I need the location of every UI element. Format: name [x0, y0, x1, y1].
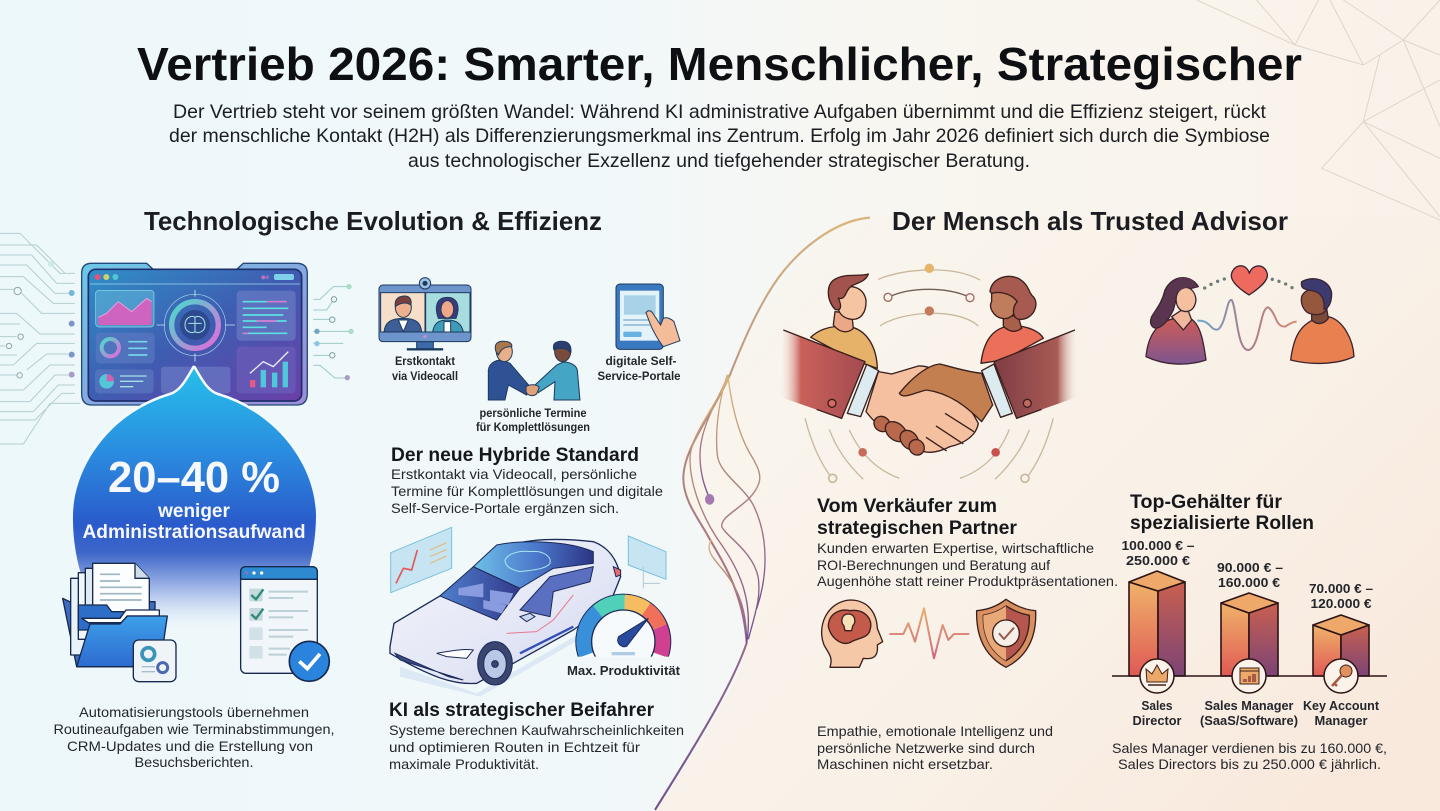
big number: 20–40 %	[108, 453, 280, 502]
divider curve	[655, 218, 870, 810]
text: customer expectations	[817, 540, 1118, 589]
intro text: aus technologischer Exzellenz und tiefgehender strategischer Beratung.	[408, 150, 1030, 172]
values: 250.000 €	[1126, 554, 1190, 568]
role labels	[1132, 699, 1380, 728]
floating chart panels	[391, 527, 666, 593]
label: max productivity: Max. Produktivität	[567, 664, 681, 678]
icon: checklist window	[241, 567, 329, 681]
values	[1122, 539, 1373, 611]
gauge	[575, 594, 672, 657]
bar: Sales Director	[1129, 571, 1185, 676]
label: self-service: Service-Portale	[598, 371, 680, 383]
icon: folder with documents and gears	[63, 563, 176, 682]
text: empathy: persönliche Netzwerke sind durch	[817, 740, 1035, 756]
heading: from seller to partner: strategischen Partner	[817, 518, 1018, 539]
text: hybrid standard: Erstkontakt via Videocall, persönliche	[391, 466, 637, 482]
role labels: (SaaS/Software)	[1200, 714, 1298, 728]
label: self-service	[598, 356, 680, 383]
text: automation: CRM-Updates und die Erstellung von	[67, 738, 313, 754]
heading: from seller to partner	[817, 496, 1018, 539]
role labels: Sales Manager	[1204, 699, 1294, 713]
heading: from seller to partner: Vom Verkäufer zum	[817, 496, 997, 517]
callout caption: Administrationsaufwand	[82, 522, 306, 543]
text: automation: Besuchsberichten.	[134, 754, 254, 770]
title: Vertrieb 2026: Smarter, Menschlicher, Strategischer	[137, 38, 1302, 90]
values: 90.000 € –	[1217, 561, 1283, 575]
icon: two people shaking hands	[488, 341, 580, 400]
role labels: Key Account	[1303, 699, 1380, 713]
text: empathy	[817, 723, 1053, 772]
label: personal meetings: persönliche Termine	[480, 408, 586, 420]
heading: top salaries: Top-Gehälter für	[1130, 492, 1283, 513]
values: 100.000 € –	[1122, 539, 1195, 553]
illustration: handshake with two people	[779, 264, 1078, 482]
callout: 20-40 percent drop	[73, 366, 316, 640]
person left	[811, 274, 877, 368]
text: hybrid standard: Termine für Komplettlösungen und digitale	[391, 483, 663, 499]
label: video call: via Videocall	[392, 371, 458, 383]
circuit lines right of dashboard	[313, 284, 354, 380]
bar: Sales Manager	[1221, 593, 1278, 676]
intro text	[169, 101, 1270, 172]
values: 160.000 €	[1218, 576, 1280, 590]
role labels: Director	[1132, 714, 1182, 728]
text: salaries: Sales Directors bis zu 250.000 € jährlich.	[1118, 756, 1381, 772]
text: empathy: Empathie, emotionale Intelligenz und	[817, 723, 1053, 739]
role labels: Manager	[1314, 714, 1368, 728]
callout caption	[82, 501, 306, 543]
heading: KI co-driver: KI als strategischer Beifahrer	[389, 700, 655, 721]
cuffs	[847, 364, 879, 417]
illustration: AI car with gauge	[390, 527, 670, 697]
bar: Key Account Manager	[1313, 615, 1369, 676]
text: hybrid standard	[391, 466, 663, 516]
text: customer expectations: ROI-Berechnungen und Beratung auf	[817, 557, 1050, 573]
bar chart: salaries	[1112, 539, 1387, 728]
text: salaries	[1112, 740, 1387, 772]
text: customer expectations: Kunden erwarten Expertise, wirtschaftliche	[817, 540, 1094, 556]
heading: Der Mensch als Trusted Advisor: Der Mensch als Trusted Advisor	[892, 206, 1288, 236]
icon: video call monitor	[379, 278, 471, 350]
text: customer expectations: Augenhöhe statt reiner Produktpräsentationen.	[817, 573, 1118, 589]
heading: top salaries	[1130, 492, 1314, 534]
heading: Technologische Evolution: Technologische Evolution & Effizienz	[144, 206, 602, 236]
callout caption: weniger	[157, 501, 230, 522]
text: KI co-driver: maximale Produktivität.	[389, 756, 539, 772]
label: video call	[392, 356, 458, 383]
text: automation: Routineaufgaben wie Terminabstimmungen,	[54, 721, 334, 737]
person right	[981, 276, 1043, 363]
icon: tablet with hand	[616, 284, 680, 349]
dashboard screen	[82, 263, 307, 405]
text: KI co-driver: Systeme berechnen Kaufwahrscheinlichkeiten	[389, 722, 684, 738]
icon: crown	[1140, 659, 1174, 693]
icon: key	[1324, 659, 1358, 693]
text: salaries: Sales Manager verdienen bis zu 160.000 €,	[1112, 740, 1387, 756]
heading: top salaries: spezialisierte Rollen	[1130, 513, 1314, 534]
label: self-service: digitale Self-	[606, 356, 677, 368]
icons: brain head, pulse and shield	[822, 599, 1036, 667]
sleeves	[779, 330, 865, 418]
text: KI co-driver	[389, 722, 684, 772]
label: video call: Erstkontakt	[395, 356, 455, 368]
heading: hybrid standard: Der neue Hybride Standard	[391, 445, 639, 466]
text: automation: Automatisierungstools übernehmen	[79, 704, 309, 720]
circuit lines left	[0, 233, 80, 444]
text: automation	[54, 704, 334, 770]
illustration: couple with heart	[1146, 266, 1354, 364]
label: personal meetings	[476, 408, 590, 434]
text: KI co-driver: und optimieren Routen in Echtzeit für	[389, 739, 640, 755]
text: empathy: Maschinen nicht ersetzbar.	[817, 756, 993, 772]
hand right thumb	[899, 364, 993, 422]
hand left with fingers	[866, 366, 978, 452]
values: 120.000 €	[1310, 597, 1372, 611]
label: personal meetings: für Komplettlösungen	[476, 422, 590, 434]
text: hybrid standard: Self-Service-Portale ergänzen sich.	[391, 500, 619, 516]
icon: software window	[1232, 659, 1266, 693]
decorative polygon network top right	[1197, 0, 1440, 220]
intro text: Der Vertrieb steht vor seinem größten Wandel: Während KI administrative Aufgaben übernimmt und die Effizienz steigert, rückt	[173, 101, 1267, 123]
values: 70.000 € –	[1309, 582, 1373, 596]
role labels: Sales	[1142, 699, 1173, 713]
intro text: der menschliche Kontakt (H2H) als Differenzierungsmerkmal ins Zentrum. Erfolg im Jahr 2026 definiert sich durch die Symbiose	[169, 125, 1270, 147]
